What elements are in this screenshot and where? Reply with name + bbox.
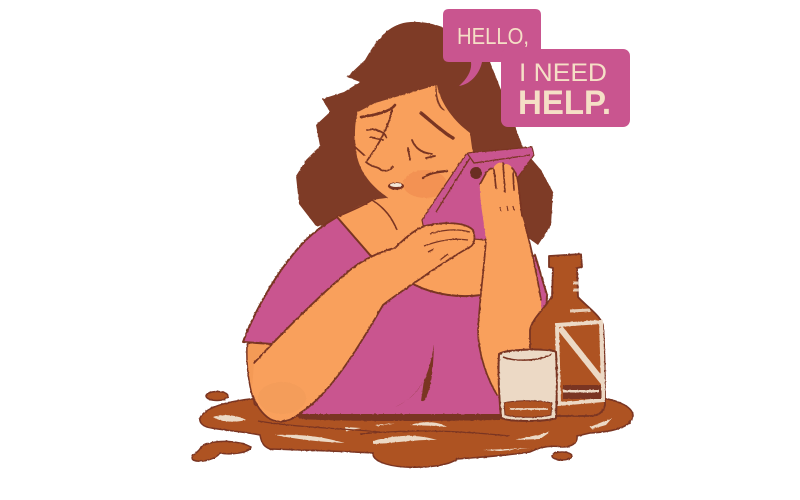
hair: [296, 22, 553, 245]
phone camera: [470, 167, 482, 179]
hair strand: [436, 85, 444, 110]
neck and chest: [337, 190, 495, 305]
shirt: torso and sleeve: [243, 217, 547, 415]
small puddle drops: [192, 392, 572, 461]
drink in glass: [504, 401, 552, 417]
glass: [499, 350, 557, 421]
right arm and palm: [478, 163, 543, 395]
phone: [422, 147, 534, 240]
bubble text: hello: HELLO,: [457, 23, 529, 49]
left arm and hand: [252, 223, 474, 421]
bubble text: I need: I NEED: [519, 59, 607, 87]
bottle: [530, 254, 605, 416]
face: [355, 85, 475, 215]
shirt fold: [393, 344, 434, 408]
puddle highlights: [213, 415, 612, 451]
mouth: [388, 182, 404, 190]
bubble text: help: HELP.: [518, 84, 611, 122]
speech bubble: hello: [443, 9, 541, 86]
speech bubble: I need help: [501, 49, 630, 127]
bottle label: [557, 322, 603, 404]
eyebrows and eyes: [355, 105, 453, 178]
spilled drink puddle: [200, 398, 633, 467]
